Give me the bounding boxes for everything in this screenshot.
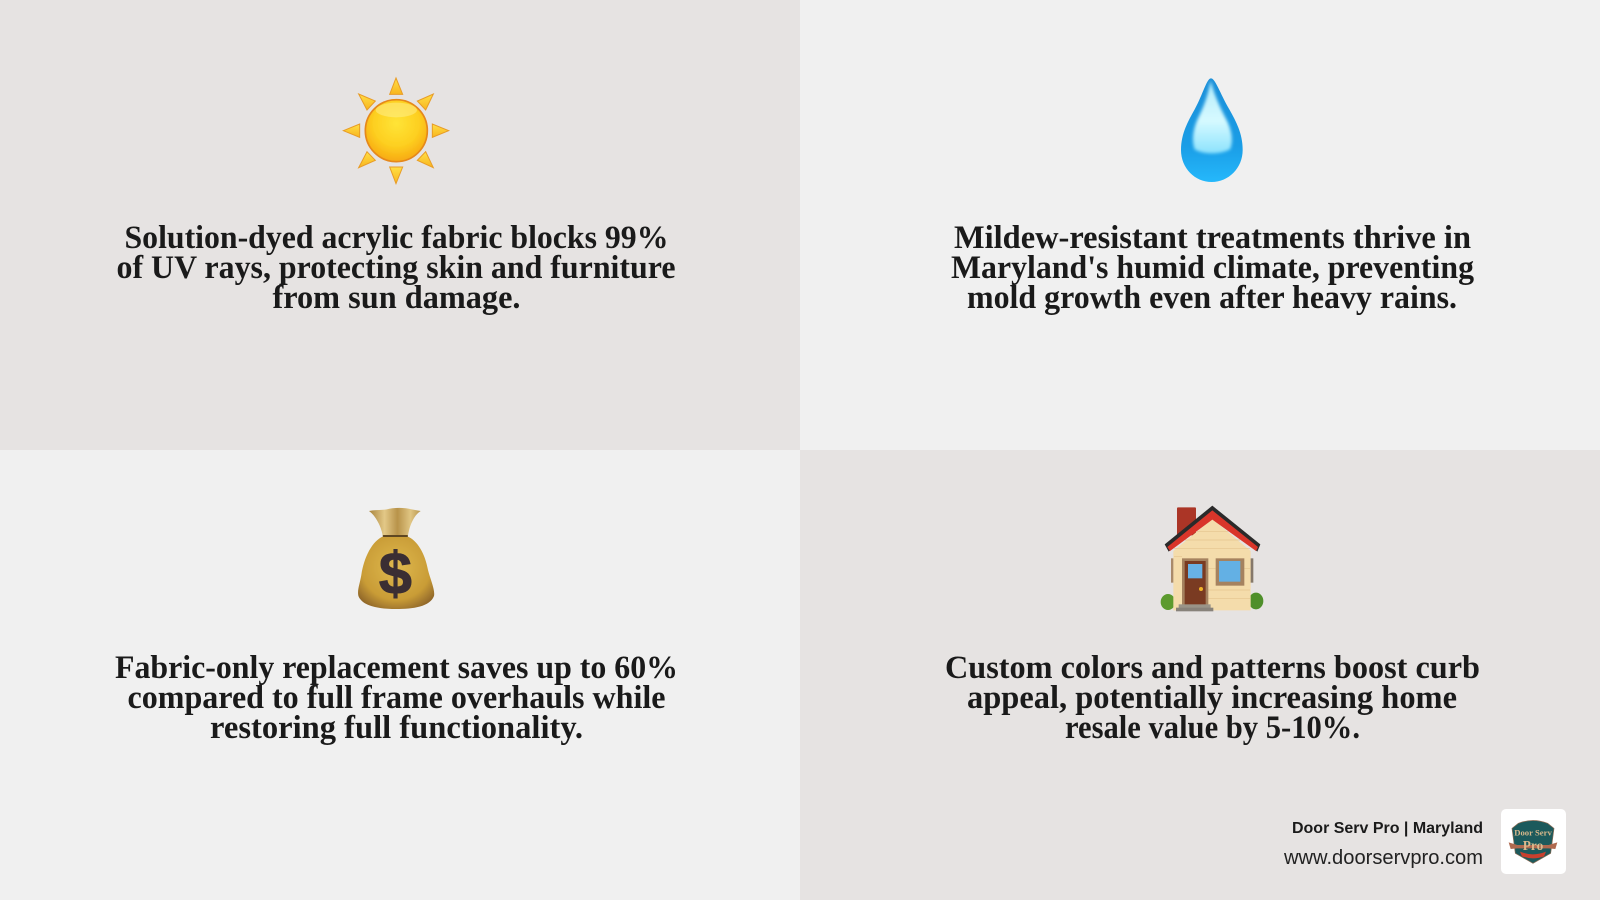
website: www.doorservpro.com [1283, 847, 1483, 869]
text: mildew resistance: mold growth even after heavy rains. [967, 280, 1457, 316]
text: cost savings: restoring full functionality. [210, 710, 583, 746]
text: curb appeal: resale value by 5-10%. [1065, 710, 1360, 746]
text: curb appeal [945, 650, 1480, 746]
text: curb appeal: appeal, potentially increasing home [967, 680, 1457, 716]
logo: Door Serv [1514, 828, 1552, 838]
text: UV protection: Solution-dyed acrylic fabric blocks 99% [124, 220, 668, 256]
panel: cost savings [0, 450, 800, 900]
logo: Pro [1523, 838, 1544, 853]
panel: curb appeal [800, 450, 1600, 900]
icon: sun [343, 78, 449, 184]
text: cost savings: Fabric-only replacement saves up to 60% [115, 650, 678, 686]
footer: brand [1283, 809, 1566, 874]
text: curb appeal: Custom colors and patterns boost curb [945, 650, 1480, 686]
icon: water drop [1181, 78, 1243, 182]
text: mildew resistance: Mildew-resistant treatments thrive in [954, 220, 1471, 256]
text: mildew resistance: Maryland's humid climate, preventing [951, 250, 1474, 286]
text: UV protection: from sun damage. [272, 280, 520, 316]
text: cost savings [115, 650, 678, 746]
text: UV protection [116, 220, 676, 316]
text: mildew resistance [951, 220, 1474, 316]
icon: house [1161, 506, 1263, 611]
icon: money bag [358, 508, 434, 609]
panel: mildew resistance [952, 78, 1474, 315]
logo [1501, 809, 1566, 874]
icon: money bag: $ [379, 540, 412, 607]
brand name: Door Serv Pro | Maryland [1292, 820, 1483, 837]
panel: UV protection [0, 0, 800, 450]
text: UV protection: of UV rays, protecting skin and furniture [116, 250, 676, 286]
text: cost savings: compared to full frame overhauls while [128, 680, 666, 716]
